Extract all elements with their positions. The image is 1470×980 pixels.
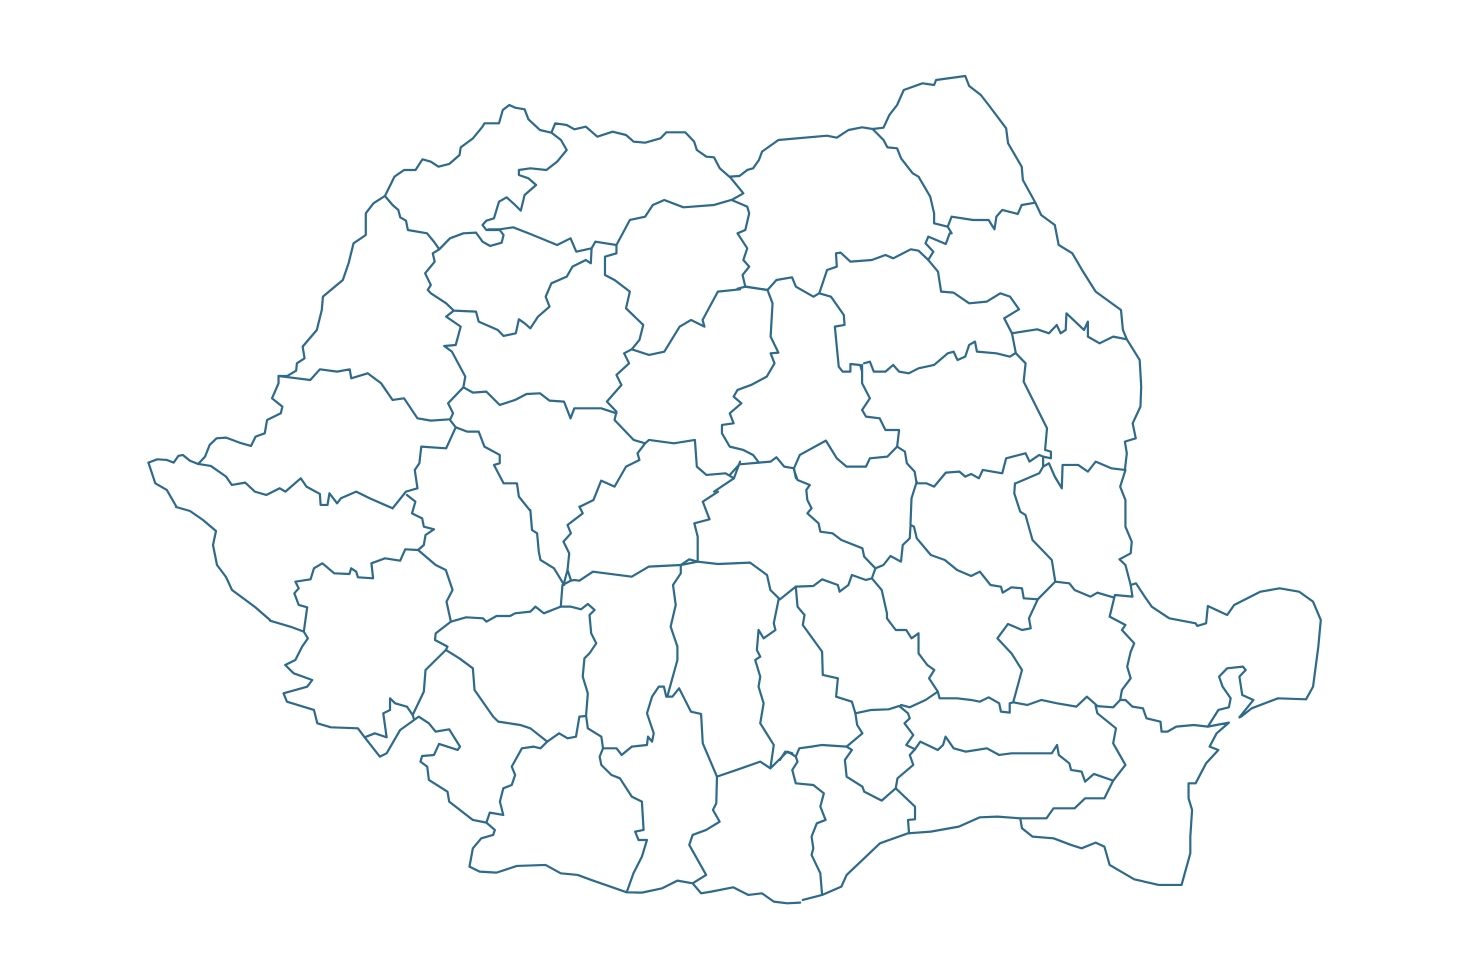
map region: south-east counties and Danube delta xyxy=(780,470,1321,900)
map region: north-east counties xyxy=(722,76,1141,488)
map region: north-west counties xyxy=(148,105,740,510)
map region: south-west counties xyxy=(270,492,800,903)
map region: western tip outer border xyxy=(176,507,270,620)
